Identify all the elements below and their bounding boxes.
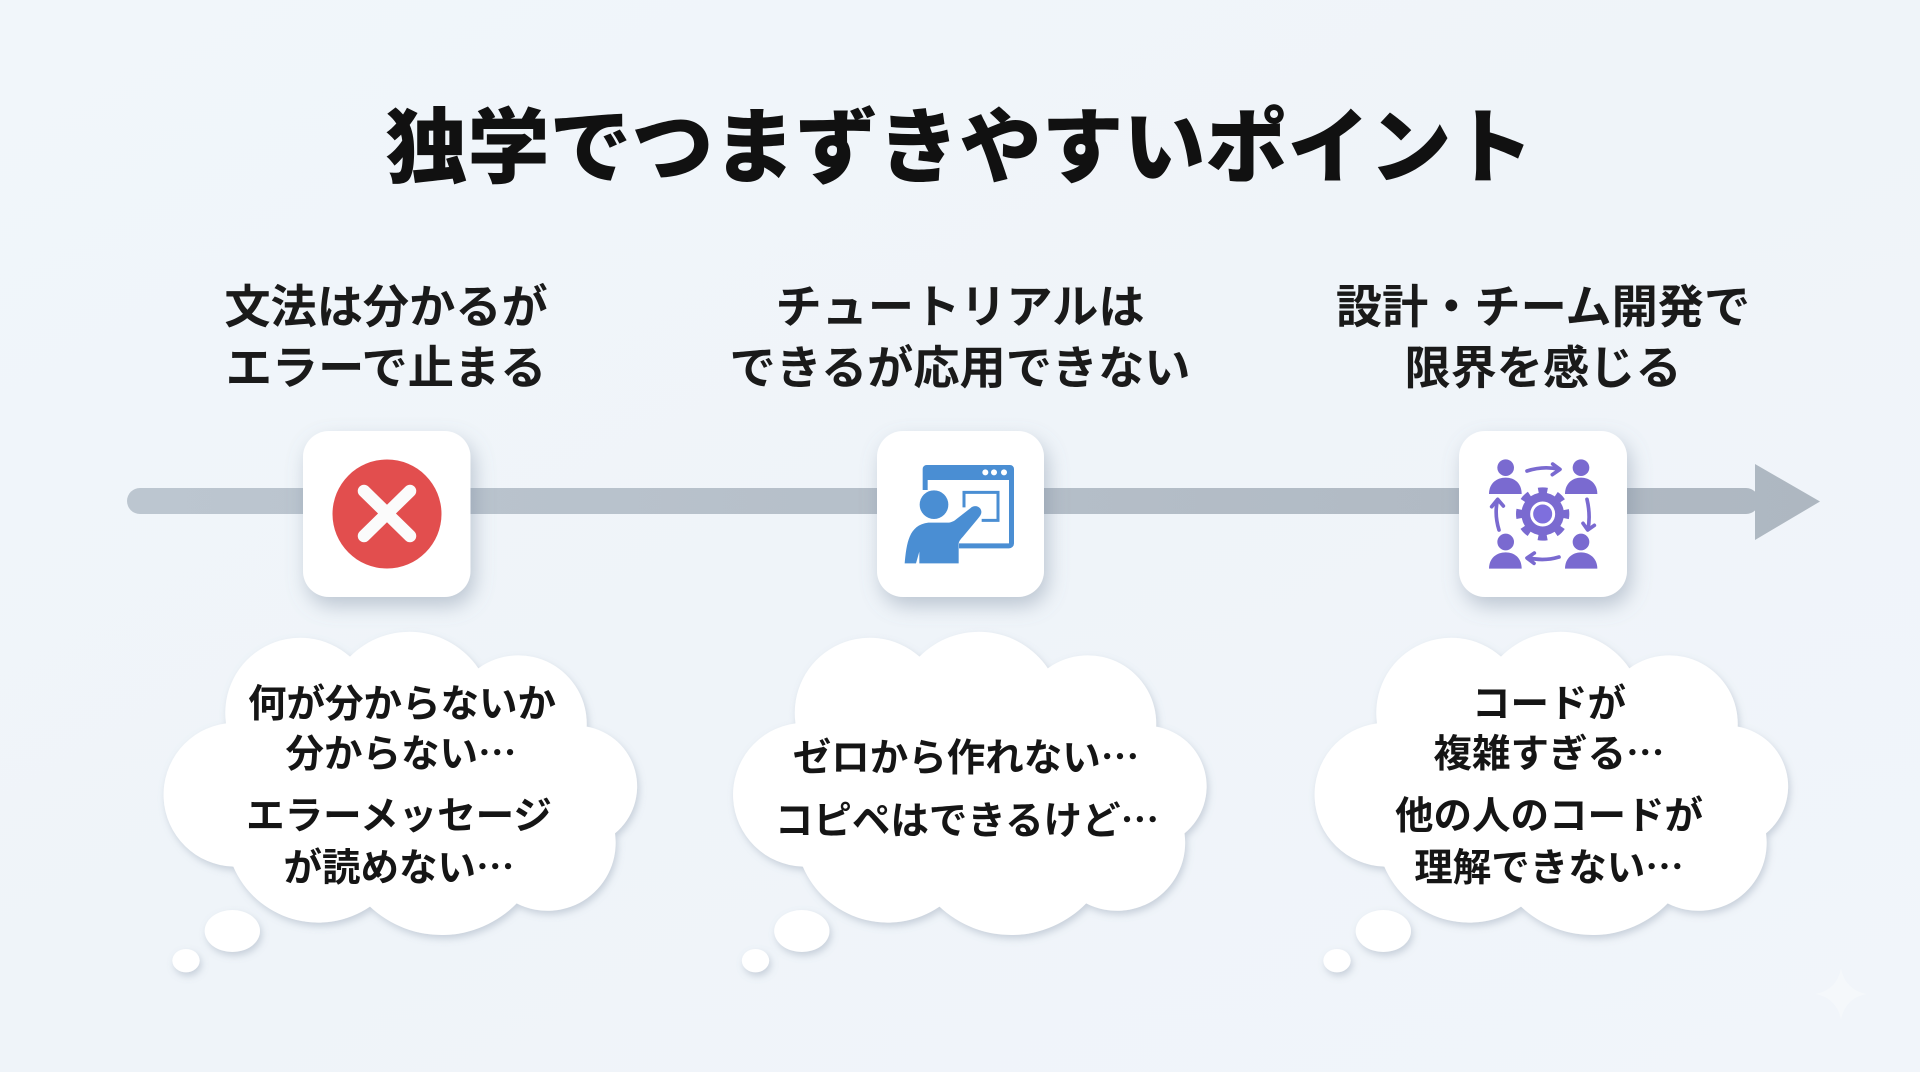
cloud shape xyxy=(1315,632,1788,972)
cloud text: エラーメッセージ xyxy=(246,785,552,841)
card: step 3 icon xyxy=(1459,431,1627,597)
cloud text: 複雑すぎる… xyxy=(1433,723,1665,779)
heading: step 1: 文法は分かるが xyxy=(224,270,548,337)
cloud text: 理解できない… xyxy=(1414,837,1684,893)
cloud text xyxy=(775,727,1159,846)
heading: step 3: 設計・チーム開発で xyxy=(1336,270,1750,337)
cloud text: 分からない… xyxy=(285,723,517,779)
timeline arrow xyxy=(127,464,1820,540)
cloud shape xyxy=(164,632,637,972)
heading: step 1 xyxy=(224,270,548,398)
thought bubble: step 1 xyxy=(164,632,637,972)
cloud text: が読めない… xyxy=(283,837,515,893)
cloud text: 他の人のコードが xyxy=(1395,785,1703,841)
cloud text xyxy=(246,673,556,893)
card: step 2 icon xyxy=(877,431,1044,597)
icon: faint sparkle xyxy=(1815,968,1867,1020)
card: step 1 icon xyxy=(303,431,470,597)
thought bubble: step 2 xyxy=(733,632,1207,972)
icon: team and gear xyxy=(1489,459,1597,569)
heading: step 2 xyxy=(730,270,1190,398)
thought bubble: step 3 xyxy=(1315,632,1788,972)
cloud text: コピペはできるけど… xyxy=(775,790,1159,846)
icon: person at tutorial screen xyxy=(905,465,1014,563)
heading: step 2: チュートリアルは xyxy=(775,270,1145,337)
cloud shape xyxy=(733,632,1207,972)
heading: step 2: できるが応用できない xyxy=(730,331,1190,398)
heading: step 1: エラーで止まる xyxy=(226,331,546,398)
icon: red cross xyxy=(332,460,442,568)
heading: step 3: 限界を感じる xyxy=(1404,331,1682,398)
cloud text: コードが xyxy=(1472,673,1626,729)
heading: step 3 xyxy=(1336,270,1750,398)
title: 独学でつまずきやすいポイント xyxy=(385,81,1534,200)
cloud text xyxy=(1395,673,1703,893)
cloud text: ゼロから作れない… xyxy=(793,727,1139,783)
cloud text: 何が分からないか xyxy=(248,673,556,729)
